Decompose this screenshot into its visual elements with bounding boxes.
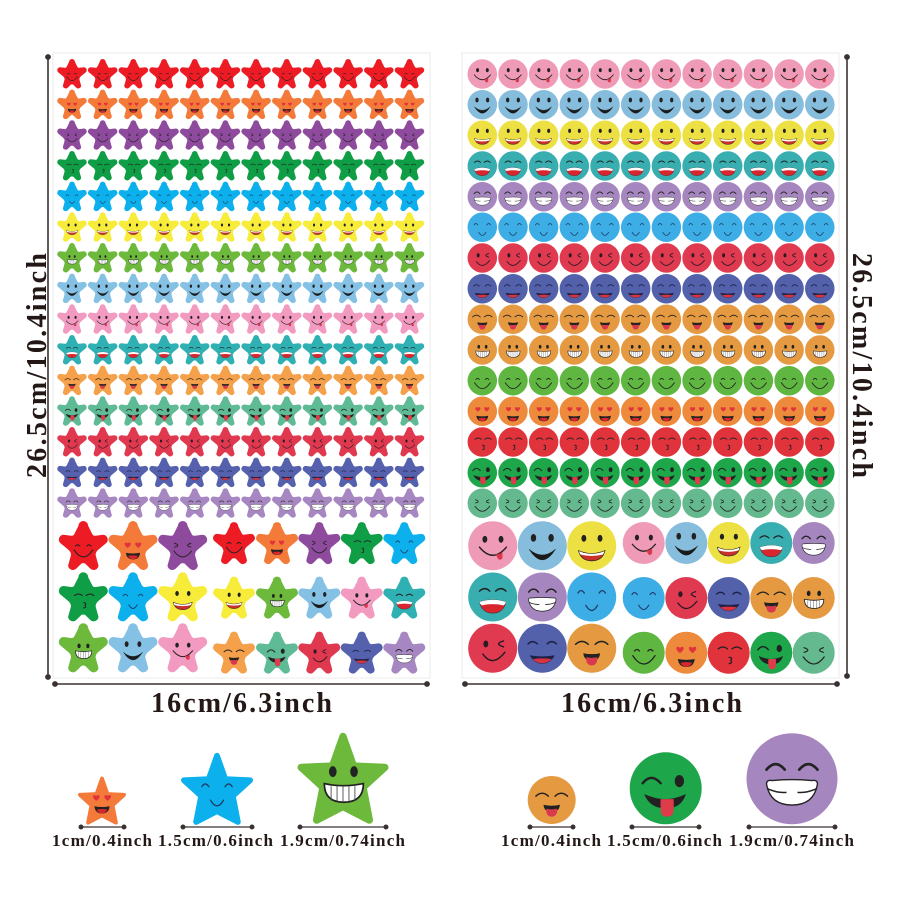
star row 10: teal xyxy=(57,335,424,364)
large and medium stars xyxy=(59,521,425,674)
circle row 3: yellow xyxy=(468,121,835,150)
star row 12: mint xyxy=(57,396,424,426)
circle row 7: crimson xyxy=(468,243,835,273)
dimension arrow: right sheet width xyxy=(463,682,839,686)
sample: small star 1cm xyxy=(80,778,124,823)
star row 2: orange hearts xyxy=(57,90,424,119)
sample: small circle 1cm xyxy=(528,776,576,824)
dimension arrow: left sheet width xyxy=(53,682,429,686)
circle row 15: mint xyxy=(468,489,835,518)
label: left sheet height: 26.5cm/10.4inch xyxy=(22,253,53,478)
size label: circle 1.9cm: 1.9cm/0.74inch xyxy=(729,831,855,850)
size measure lines xyxy=(79,825,837,829)
circle row 8: indigo xyxy=(468,274,835,303)
label: right sheet height: 26.5cm/10.4inch xyxy=(846,253,877,478)
circle row 1: pink xyxy=(468,59,835,89)
star row 6: yellow xyxy=(57,212,424,242)
circle row 13: red kiss xyxy=(468,427,835,457)
size label: star 1.5cm: 1.5cm/0.6inch xyxy=(158,831,274,850)
sample: medium star 1.5cm xyxy=(184,756,250,822)
sample: medium circle 1.5cm xyxy=(630,752,702,824)
circle row 5: lavender xyxy=(468,182,835,211)
size label: circle 1.5cm: 1.5cm/0.6inch xyxy=(607,831,723,850)
star row 13: crimson xyxy=(57,427,424,456)
sample: large circle 1.9cm xyxy=(746,733,838,824)
star row 14: indigo xyxy=(57,458,424,487)
large and medium circles xyxy=(468,521,835,674)
star row 3: purple xyxy=(57,120,424,150)
dimension arrow: left sheet height xyxy=(46,55,50,679)
star row 11: orange xyxy=(57,366,424,395)
circle row 11: green xyxy=(468,366,835,395)
circle row 12: orange hearts xyxy=(468,397,835,426)
circle row 9: orange tongue xyxy=(468,305,835,334)
star row 7: green teeth xyxy=(57,243,424,272)
label: left sheet width: 16cm/6.3inch xyxy=(151,688,332,719)
panel: round sticker sheet xyxy=(462,53,839,678)
circle row 6: blue xyxy=(468,213,835,242)
star row 8: light blue xyxy=(57,274,424,303)
circle row 14: green tongue xyxy=(468,458,835,487)
panel: star sticker sheet xyxy=(53,53,430,678)
sample: large star 1.9cm xyxy=(301,736,385,820)
circle row 4: teal xyxy=(468,151,835,181)
size label: star 1.9cm: 1.9cm/0.74inch xyxy=(280,831,406,850)
dimension arrow: right sheet height xyxy=(845,55,849,678)
size label: circle 1cm: 1cm/0.4inch xyxy=(501,831,602,850)
label: right sheet width: 16cm/6.3inch xyxy=(561,688,742,719)
circle row 10: orange teeth xyxy=(468,335,835,365)
star row 4: green kiss xyxy=(57,151,424,180)
star row 1: red xyxy=(57,59,424,88)
star row 9: pink xyxy=(57,304,424,334)
circle row 2: light blue xyxy=(468,90,835,119)
size label: star 1cm: 1cm/0.4inch xyxy=(52,831,153,850)
star row 15: lavender xyxy=(57,488,424,518)
star row 5: blue xyxy=(57,182,424,211)
